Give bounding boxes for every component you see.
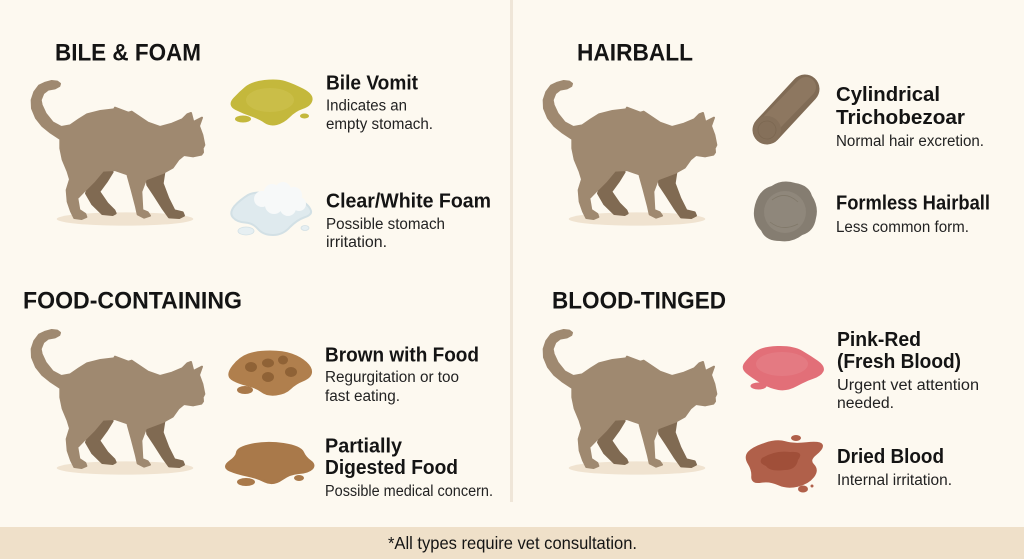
icon: bile puddle (232, 81, 311, 124)
item: dried blood text: Dried Blood (837, 445, 944, 468)
item: cylindrical trichobezoar text (836, 83, 984, 150)
icon: cat (544, 330, 716, 475)
icon: partially digested puddle (226, 443, 313, 486)
icon: pink-red puddle (744, 347, 822, 390)
item: pink-red fresh blood text: needed. (837, 395, 894, 412)
footer note (0, 527, 1024, 559)
icon: cylindrical hair log (753, 87, 806, 144)
heading: hairball: HAIRBALL (577, 40, 693, 66)
item: brown with food text (325, 344, 479, 405)
item: partially digested food text (325, 434, 493, 500)
item: cylindrical trichobezoar text: Trichobezoar (836, 106, 965, 129)
panel: bile and foam (32, 40, 491, 251)
item: formless hairball text (836, 192, 990, 236)
item: partially digested food text: Possible medical concern. (325, 483, 493, 500)
item: dried blood text: Internal irritation. (837, 472, 952, 489)
item: pink-red fresh blood text: (Fresh Blood) (837, 350, 961, 373)
panel: food-containing (23, 288, 493, 500)
item: clear white foam text: irritation. (326, 234, 387, 251)
item: bile vomit text (326, 72, 433, 133)
panel: hairball (544, 40, 990, 240)
item: brown with food text: Brown with Food (325, 344, 479, 366)
item: brown with food text: Regurgitation or too (325, 369, 459, 386)
icon: cat (544, 81, 716, 226)
heading: blood-tinged: BLOOD-TINGED (552, 288, 726, 314)
item: brown with food text: fast eating. (325, 388, 400, 405)
item: cylindrical trichobezoar text: Normal hair excretion. (836, 133, 984, 150)
footer note: *All types require vet consultation. (388, 533, 637, 553)
item: pink-red fresh blood text: Pink-Red (837, 328, 921, 351)
item: clear white foam text (326, 190, 491, 251)
item: partially digested food text: Partially (325, 434, 403, 458)
heading: food-containing: FOOD-CONTAINING (23, 288, 242, 314)
item: clear white foam text: Possible stomach (326, 216, 445, 233)
icon: cat (32, 330, 204, 475)
item: clear white foam text: Clear/White Foam (326, 190, 491, 212)
item: partially digested food text: Digested Food (325, 456, 458, 479)
item: formless hairball text: Formless Hairball (836, 192, 990, 214)
item: cylindrical trichobezoar text: Cylindrical (836, 83, 940, 106)
icon: brown vomit with food (230, 352, 311, 394)
item: formless hairball text: Less common form. (836, 219, 969, 236)
icon: cat (32, 81, 204, 226)
icon: dried blood stain (747, 435, 822, 492)
item: dried blood text (837, 445, 952, 489)
icon: white foam puddle (231, 182, 311, 235)
item: bile vomit text: Indicates an (326, 98, 407, 114)
item: pink-red fresh blood text (837, 328, 979, 412)
item: pink-red fresh blood text: Urgent vet attention (837, 377, 979, 394)
item: bile vomit text: empty stomach. (326, 116, 433, 133)
icon: formless hairball (755, 183, 816, 240)
item: bile vomit text: Bile Vomit (326, 72, 418, 94)
panel: blood-tinged (544, 288, 979, 492)
heading: bile and foam: BILE & FOAM (55, 40, 201, 66)
